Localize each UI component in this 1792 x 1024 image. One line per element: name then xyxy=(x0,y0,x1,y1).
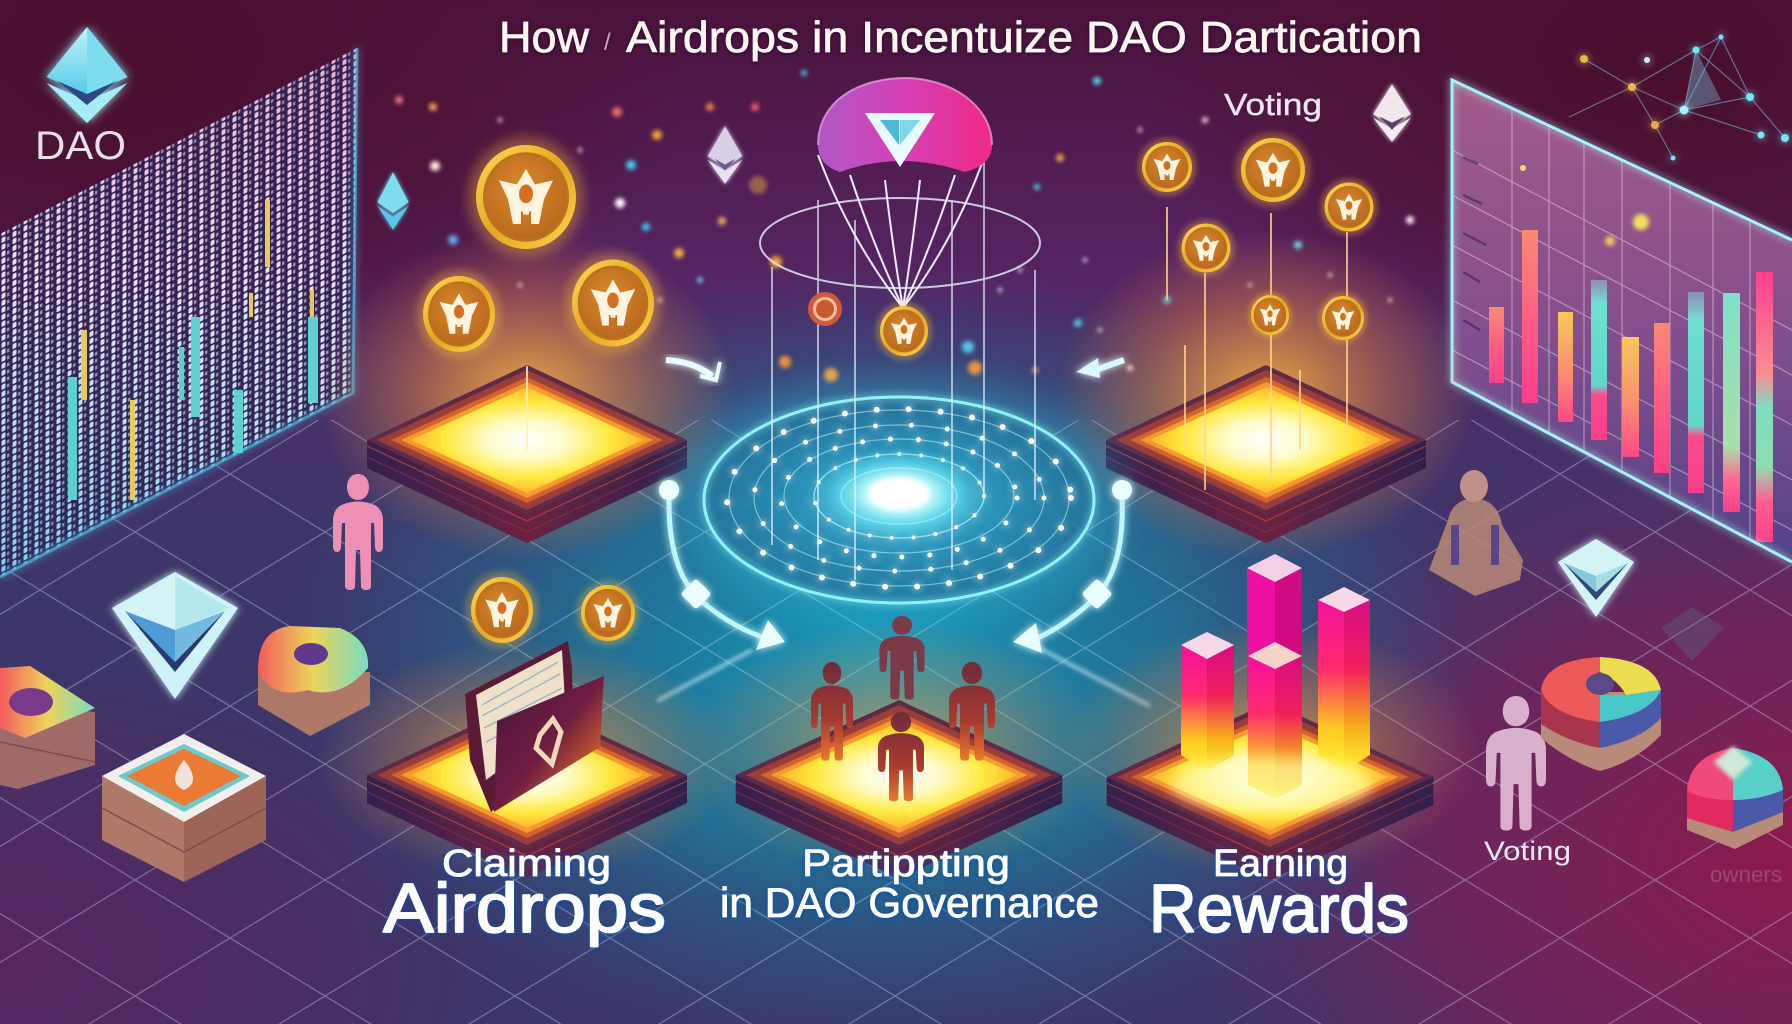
right chart panel with bars xyxy=(1452,80,1792,562)
icon: folder wallet xyxy=(465,641,604,812)
sparkle particles xyxy=(395,70,1414,382)
label: participating in DAO governance: Partippting xyxy=(802,843,1010,885)
platform: claiming airdrops xyxy=(317,640,737,880)
parachute airdrop xyxy=(760,78,1040,580)
coins: falling from parachute xyxy=(808,292,932,360)
title: / xyxy=(604,29,611,56)
label: claiming airdrops: Claiming xyxy=(442,843,611,885)
DAO logo: DAO xyxy=(35,124,126,168)
arrow: upper left xyxy=(666,360,720,380)
platform: earning rewards xyxy=(1060,620,1480,880)
bar series xyxy=(1489,230,1773,542)
label: participating in DAO governance xyxy=(720,843,1099,926)
person: seated right xyxy=(1429,470,1523,596)
title: Airdrops in Incentuize DAO Dartication xyxy=(626,13,1422,62)
data wall: left code panel xyxy=(0,48,357,577)
label: claiming airdrops xyxy=(383,843,666,947)
icon: faint cube right xyxy=(1661,607,1724,661)
label: earning rewards: Rewards xyxy=(1149,871,1409,947)
central hub xyxy=(669,375,1129,625)
icon: white diamond top right xyxy=(1373,84,1411,142)
stacked block: far left xyxy=(0,666,95,789)
icon: diamond right xyxy=(1558,539,1634,617)
canopy emblem xyxy=(865,113,935,167)
stacked block: donut left xyxy=(258,626,370,736)
label: earning rewards: Earning xyxy=(1213,843,1348,885)
platform: DAO governance xyxy=(689,620,1109,880)
front bar xyxy=(1248,642,1302,799)
coins: above folder xyxy=(466,572,639,648)
icon: large diamond left xyxy=(112,572,238,699)
person: pale right with voting label: Voting xyxy=(1484,836,1571,866)
right bar xyxy=(1318,587,1370,771)
person: pale right with voting label xyxy=(1484,696,1571,866)
coins: left cluster xyxy=(417,137,661,358)
platform: top right xyxy=(1056,207,1476,560)
rewards 3D bars xyxy=(1172,554,1372,813)
faint owners label: owners xyxy=(1710,862,1782,887)
label: participating in DAO governance: in DAO Governance xyxy=(720,879,1099,926)
stacked block: orange tile xyxy=(102,734,266,882)
title: How xyxy=(499,13,589,62)
left bar xyxy=(1181,632,1234,771)
back bar xyxy=(1247,554,1302,700)
pie block: far right xyxy=(1687,746,1783,849)
arrow: curved right xyxy=(1013,480,1132,653)
icon: ethereum diamond xyxy=(46,27,128,123)
label: claiming airdrops: Airdrops xyxy=(383,869,666,947)
canopy strings xyxy=(818,155,985,308)
people on governance platform xyxy=(811,616,995,801)
voting label top: Voting xyxy=(1224,87,1322,122)
person: pink left xyxy=(333,474,383,590)
constellation network xyxy=(1569,34,1789,160)
cylinder ring and drop lines xyxy=(760,150,1040,580)
icon: small cyan diamond xyxy=(377,172,409,230)
pie block: right xyxy=(1541,657,1661,771)
platform: top left xyxy=(317,230,737,560)
arrow: curved left xyxy=(659,480,785,650)
coins: voting cluster xyxy=(1138,133,1377,344)
light streaks xyxy=(657,646,1150,706)
icon: small white diamond xyxy=(708,126,742,184)
arrow: upper right xyxy=(1076,358,1124,378)
DAO logo xyxy=(35,27,128,168)
rising light beams xyxy=(1167,207,1347,490)
